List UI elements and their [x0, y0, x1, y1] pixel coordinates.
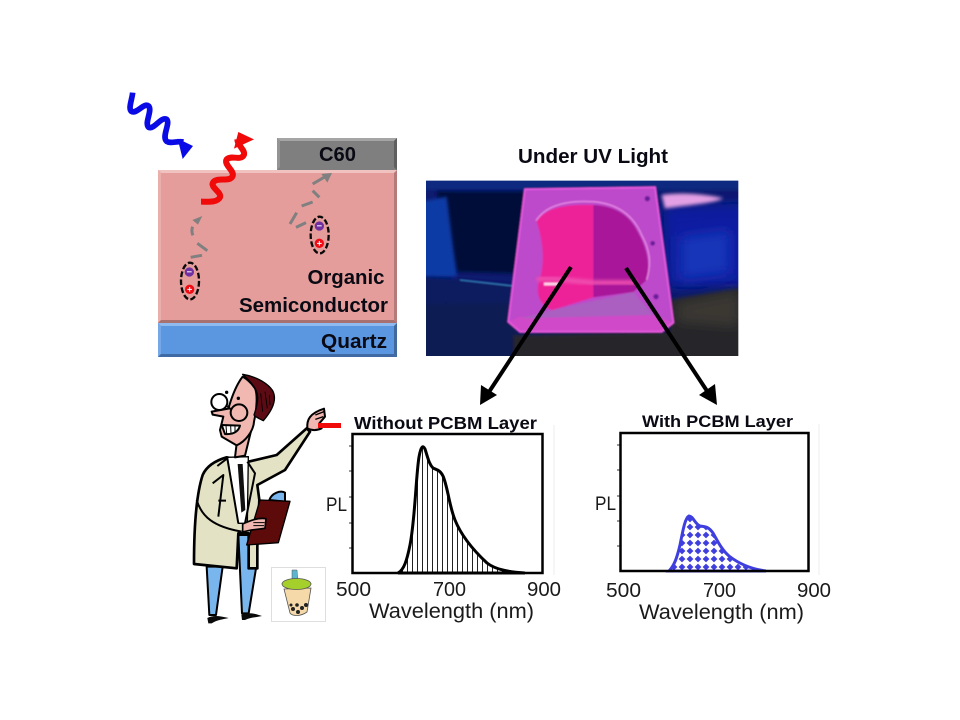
icon: red wavy emitted light arrow — [201, 132, 254, 202]
icon: right exciton — [311, 217, 329, 253]
quartz layer — [158, 323, 397, 357]
exciton path: left dashed arrow — [191, 216, 207, 257]
icon: cartoon scientist — [194, 374, 325, 623]
shoes — [207, 613, 262, 623]
raised hand — [307, 409, 325, 430]
legs — [207, 535, 256, 615]
chart title: Without PCBM Layer — [354, 413, 537, 433]
y axis label: PL — [595, 494, 616, 515]
x tick labels: 500 — [606, 580, 641, 602]
chart: with PCBM layer: 900 — [797, 580, 831, 602]
teeth — [222, 425, 240, 434]
icon: left exciton — [181, 263, 199, 299]
y axis label: PL — [326, 495, 347, 516]
C60 layer — [277, 138, 397, 170]
chart: without PCBM layer: 900 — [527, 579, 561, 601]
filled PL curve — [669, 516, 766, 571]
face — [212, 377, 257, 445]
arrow: photo right half to right chart — [626, 268, 717, 405]
organic semiconductor layer — [158, 170, 397, 323]
photo: sample under UV light — [426, 180, 738, 356]
organic semiconductor layer: Organic — [308, 267, 384, 289]
chart: with PCBM layer — [595, 412, 831, 624]
icon: blue wavy incoming light arrow — [130, 93, 193, 159]
panel: device stack diagram — [130, 93, 397, 357]
blue item behind clipboard — [269, 492, 285, 502]
chart: without PCBM layer: 700 — [433, 579, 466, 601]
chart: without PCBM layer — [326, 413, 561, 623]
x axis label: Wavelength (nm) — [639, 601, 804, 624]
x axis label: Wavelength (nm) — [369, 600, 534, 623]
filled PL curve — [398, 447, 525, 573]
pointer: red line from scientist hand — [318, 423, 341, 428]
clipboard — [247, 500, 290, 545]
glasses — [211, 394, 247, 421]
plot frame — [352, 434, 542, 573]
heading: Under UV Light: Under UV Light — [518, 146, 668, 168]
x tick labels: 500 — [336, 579, 371, 601]
plot frame — [620, 433, 808, 571]
lower hand — [243, 518, 266, 532]
organic semiconductor layer: Semiconductor — [239, 295, 388, 317]
icon: bubble tea — [272, 568, 326, 622]
neck — [235, 428, 252, 457]
exciton path: right dashed arrow — [290, 173, 332, 227]
hair — [243, 374, 274, 421]
C60 layer: C60 — [319, 144, 356, 166]
chart title: With PCBM Layer — [642, 412, 793, 431]
chart: with PCBM layer: 700 — [703, 580, 736, 602]
eye details — [225, 391, 228, 394]
arrow: photo left half to left chart — [480, 267, 571, 405]
shirt and tie — [227, 457, 248, 523]
lapels and coat lines — [197, 458, 255, 532]
lab coat — [194, 428, 310, 568]
quartz layer: Quartz — [321, 331, 387, 353]
